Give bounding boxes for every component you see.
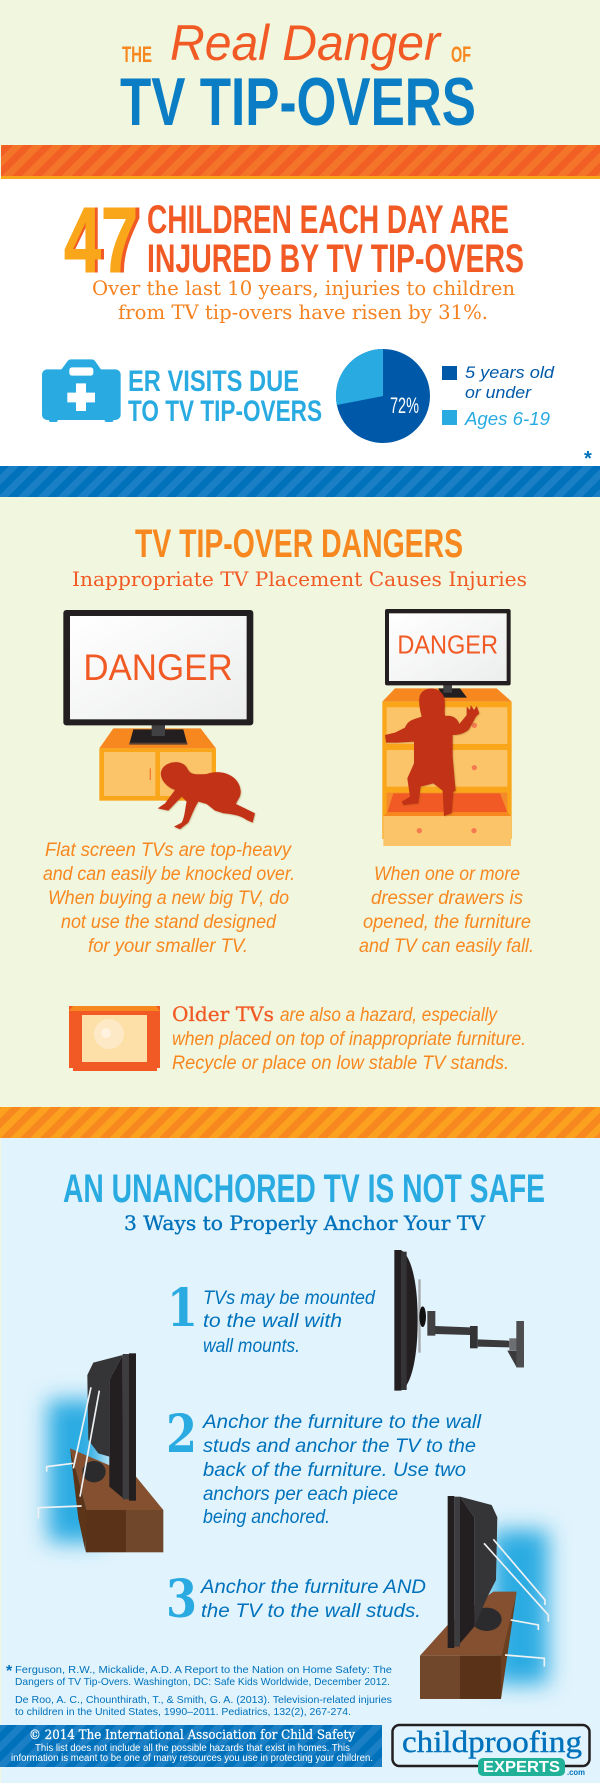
text: step 2: being anchored.: [203, 1507, 330, 1528]
text: flat screen TVs: and can easily be knocked over.: [43, 864, 295, 885]
text: flat screen TVs: Flat screen TVs are top-heavy: [45, 840, 292, 861]
text: dresser drawers: [359, 864, 534, 957]
legend: or under: [465, 383, 532, 402]
logo: childproofing experts: [392, 1724, 590, 1777]
footnotes: Dangers of TV Tip-Overs. Washington, DC: Safe Kids Worldwide, December 2012.: [15, 1676, 390, 1688]
legend: Ages 6-19: [464, 409, 550, 429]
panel: statistics: [0, 179, 600, 470]
illustration: flat TV on stand with crawling baby: [63, 610, 255, 829]
title: tv tip-overs: TV TIP-OVERS: [120, 64, 476, 140]
text: step 1: [203, 1288, 376, 1357]
title: real danger: Real Danger: [170, 15, 442, 71]
text: step 3: the TV to the wall studs.: [201, 1601, 421, 1622]
tv text danger: DANGER: [83, 646, 233, 688]
text: older TVs: are also a hazard, especially: [280, 1005, 498, 1026]
text: dresser drawers: and TV can easily fall.: [359, 936, 534, 957]
text: older TVs: when placed on top of inappropriate furniture.: [172, 1029, 526, 1050]
stat headline: [147, 198, 524, 281]
pie chart: [336, 349, 430, 443]
crawling baby silhouette: [158, 762, 255, 829]
icon: old CRT television: [69, 1006, 160, 1071]
yellow orange striped band: [0, 1107, 600, 1138]
logo: childproofing experts: EXPERTS: [483, 1759, 560, 1776]
text: step 2: studs and anchor the TV to the: [203, 1436, 476, 1457]
footnotes: to children in the United States, 1990–2011. Pediatrics, 132(2), 267-274.: [15, 1706, 351, 1718]
illustration: TV on dresser with climbing toddler: [382, 609, 512, 846]
title: the: THE: [122, 42, 152, 67]
blue striped band: [0, 466, 600, 497]
footer copyright box: [0, 1725, 382, 1767]
number 3: 3: [166, 1569, 197, 1630]
footer copyright box: information is meant to be one of many resources you use in protecting your children.: [11, 1752, 373, 1764]
text: step 2: anchors per each piece: [203, 1484, 398, 1505]
number 2: 2: [166, 1404, 197, 1465]
title: of: OF: [451, 42, 471, 67]
panel: title header: [120, 15, 476, 140]
text: step 2: Anchor the furniture to the wall: [202, 1412, 482, 1433]
panel: dangers: [43, 522, 534, 1074]
text: dresser drawers: opened, the furniture: [363, 912, 531, 933]
stat number 47: 47: [64, 188, 138, 292]
legend: 5 years old: [465, 363, 555, 382]
stat number 47: 47: [66, 188, 142, 292]
footnotes: [6, 1663, 392, 1718]
pie label: 72%: [390, 393, 419, 418]
dangers subheading: Inappropriate TV Placement Causes Injuries: [72, 567, 527, 591]
footnotes: Ferguson, R.W., Mickalide, A.D. A Report to the Nation on Home Safety: The: [15, 1664, 392, 1676]
stat subtext: [92, 276, 515, 324]
text: flat screen TVs: When buying a new big TV, do: [48, 888, 289, 909]
text: dresser drawers: dresser drawers is: [371, 888, 523, 909]
icon: first aid kit: [42, 359, 121, 422]
footnotes: *: [6, 1663, 13, 1680]
illustration: anchored TV left: [38, 1353, 163, 1552]
stat subtext: from TV tip-overs have risen by 31%.: [118, 300, 488, 324]
text: step 1: wall mounts.: [203, 1336, 300, 1357]
stat subtext: Over the last 10 years, injuries to children: [92, 276, 515, 300]
text: step 2: [202, 1412, 482, 1528]
panel: anchoring: [0, 1138, 600, 1783]
anchoring subheading: 3 Ways to Properly Anchor Your TV: [124, 1211, 486, 1235]
text: older TVs: [172, 1002, 526, 1074]
text: step 1: TVs may be mounted: [203, 1288, 376, 1309]
dangers heading: TV TIP-OVER DANGERS: [135, 522, 463, 566]
illustration: anchored TV right: [420, 1496, 548, 1699]
footnote asterisk: *: [584, 448, 592, 470]
text: step 1: to the wall with: [203, 1311, 342, 1332]
number 1: 1: [167, 1278, 198, 1339]
orange striped band: [1, 145, 600, 179]
text: dresser drawers: When one or more: [374, 864, 520, 885]
er visits heading: TO TV TIP-OVERS: [128, 395, 322, 428]
text: flat screen TVs: [43, 840, 295, 957]
text: older TVs: Recycle or place on low stable TV stands.: [172, 1053, 509, 1074]
footnotes: De Roo, A. C., Chounthirath, T., & Smith, G. A. (2013). Television-related injuries: [15, 1694, 392, 1706]
toddler silhouette: [385, 689, 479, 816]
er visits heading: ER VISITS DUE: [128, 365, 299, 398]
logo: childproofing experts: childproofing: [402, 1724, 582, 1759]
text: step 3: Anchor the furniture AND: [200, 1577, 426, 1598]
tv text danger: DANGER: [397, 629, 498, 659]
text: flat screen TVs: not use the stand designed: [61, 912, 277, 933]
er visits heading: [128, 365, 322, 428]
text: step 3: [200, 1577, 426, 1622]
footer copyright box: © 2014 The International Association for Child Safety: [29, 1728, 356, 1743]
text: step 2: back of the furniture. Use two: [203, 1460, 466, 1481]
illustration: TV on wall mount: [394, 1250, 524, 1391]
legend: [442, 363, 555, 429]
logo: childproofing experts: .com: [567, 1768, 585, 1777]
text: older TVs: Older TVs: [172, 1002, 274, 1026]
footer copyright box: This list does not include all the possible hazards that exist in homes. This: [35, 1742, 350, 1754]
text: flat screen TVs: for your smaller TV.: [88, 936, 248, 957]
